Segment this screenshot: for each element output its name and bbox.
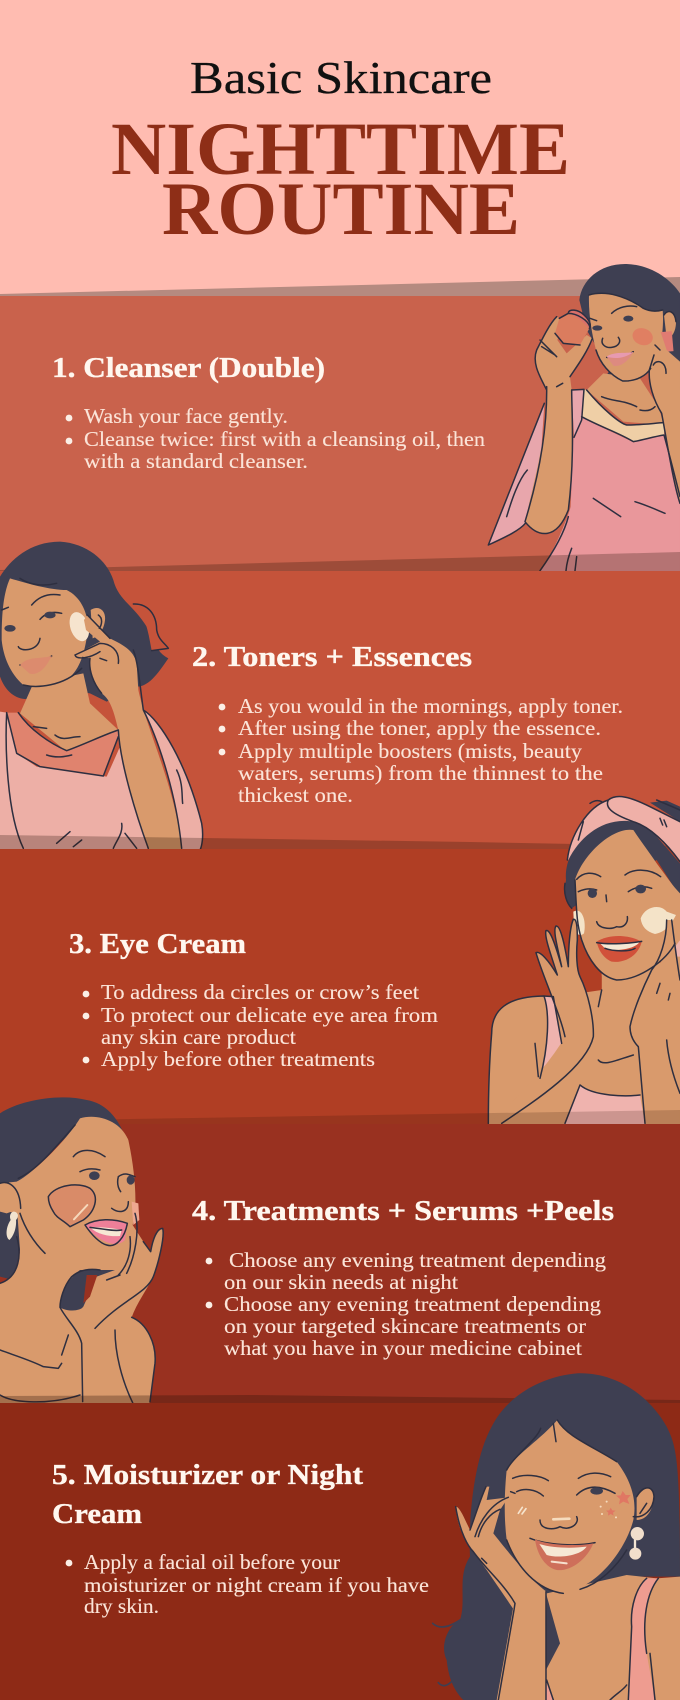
bullet list: step 3: any skin care product [101, 1025, 296, 1049]
bullet list: step 2: As you would in the mornings, apply toner. [238, 694, 623, 718]
illustration: woman in profile with face mask [0, 1097, 163, 1403]
title: Nighttime: NIGHTTIME [111, 108, 570, 191]
bullet list: step 5: Apply a facial oil before your [84, 1550, 340, 1574]
bullet list: step 2: Apply multiple boosters (mists, beauty [238, 739, 583, 763]
bullet list: step 2: After using the toner, apply the essence. [238, 716, 601, 740]
bullet list: step 4: Choose any evening treatment depending [224, 1292, 602, 1316]
bullet list: step 1 [66, 404, 486, 473]
bullet list: step 5 [66, 1550, 429, 1618]
bullet list: step 3: To address da circles or crow’s feet [101, 980, 419, 1004]
panel: step 5 moisturizer [0, 1373, 680, 1700]
panel: step 1 cleanser [0, 264, 680, 573]
bullet list: step 4: on our skin needs at night [224, 1270, 458, 1294]
heading: step 1: 1. Cleanser (Double) [52, 353, 325, 384]
bullet list: step 1: Wash your face gently. [84, 404, 288, 428]
bullet list: step 3: Apply before other treatments [101, 1047, 375, 1071]
illustration: woman with headband and foam [488, 797, 680, 1125]
heading: step 3: 3. Eye Cream [69, 929, 246, 960]
title: Routine: ROUTINE [162, 168, 520, 251]
heading: step 4: 4. Treatments + Serums +Peels [192, 1196, 614, 1227]
heading: step 5 [52, 1460, 364, 1530]
bullet list: step 2: waters, serums) from the thinnest to the [238, 761, 603, 785]
title: Basic Skincare: Basic Skincare [190, 52, 492, 103]
panel: step 4 treatments [0, 1097, 680, 1404]
panel: step 3 eye cream [0, 797, 680, 1125]
bullet list: step 2 [219, 694, 623, 807]
header panel [0, 0, 680, 300]
bullet list: step 5: dry skin. [84, 1594, 159, 1618]
bullet list: step 4: what you have in your medicine cabinet [224, 1336, 582, 1360]
panel: step 2 toners [0, 542, 680, 852]
heading: step 2: 2. Toners + Essences [192, 642, 472, 673]
bullet list: step 4: on your targeted skincare treatments or [224, 1314, 586, 1338]
bullet list: step 4: Choose any evening treatment depending [229, 1248, 607, 1272]
bullet list: step 1: Cleanse twice: first with a cleansing oil, then [84, 427, 486, 451]
bullet list: step 1: with a standard cleanser. [84, 449, 308, 473]
bullet list: step 2: thickest one. [238, 783, 353, 807]
bullet list: step 3: To protect our delicate eye area from [101, 1003, 438, 1027]
heading: step 5: 5. Moisturizer or Night [52, 1460, 364, 1491]
bullet list: step 4 [206, 1248, 607, 1360]
illustration: woman holding jar [488, 264, 680, 573]
illustration: woman with cotton pad [0, 542, 203, 852]
illustration: smiling woman winking [433, 1373, 680, 1700]
bullet list: step 5: moisturizer or night cream if you have [84, 1573, 429, 1597]
bullet list: step 3 [83, 980, 438, 1071]
heading: step 5: Cream [52, 1499, 142, 1530]
